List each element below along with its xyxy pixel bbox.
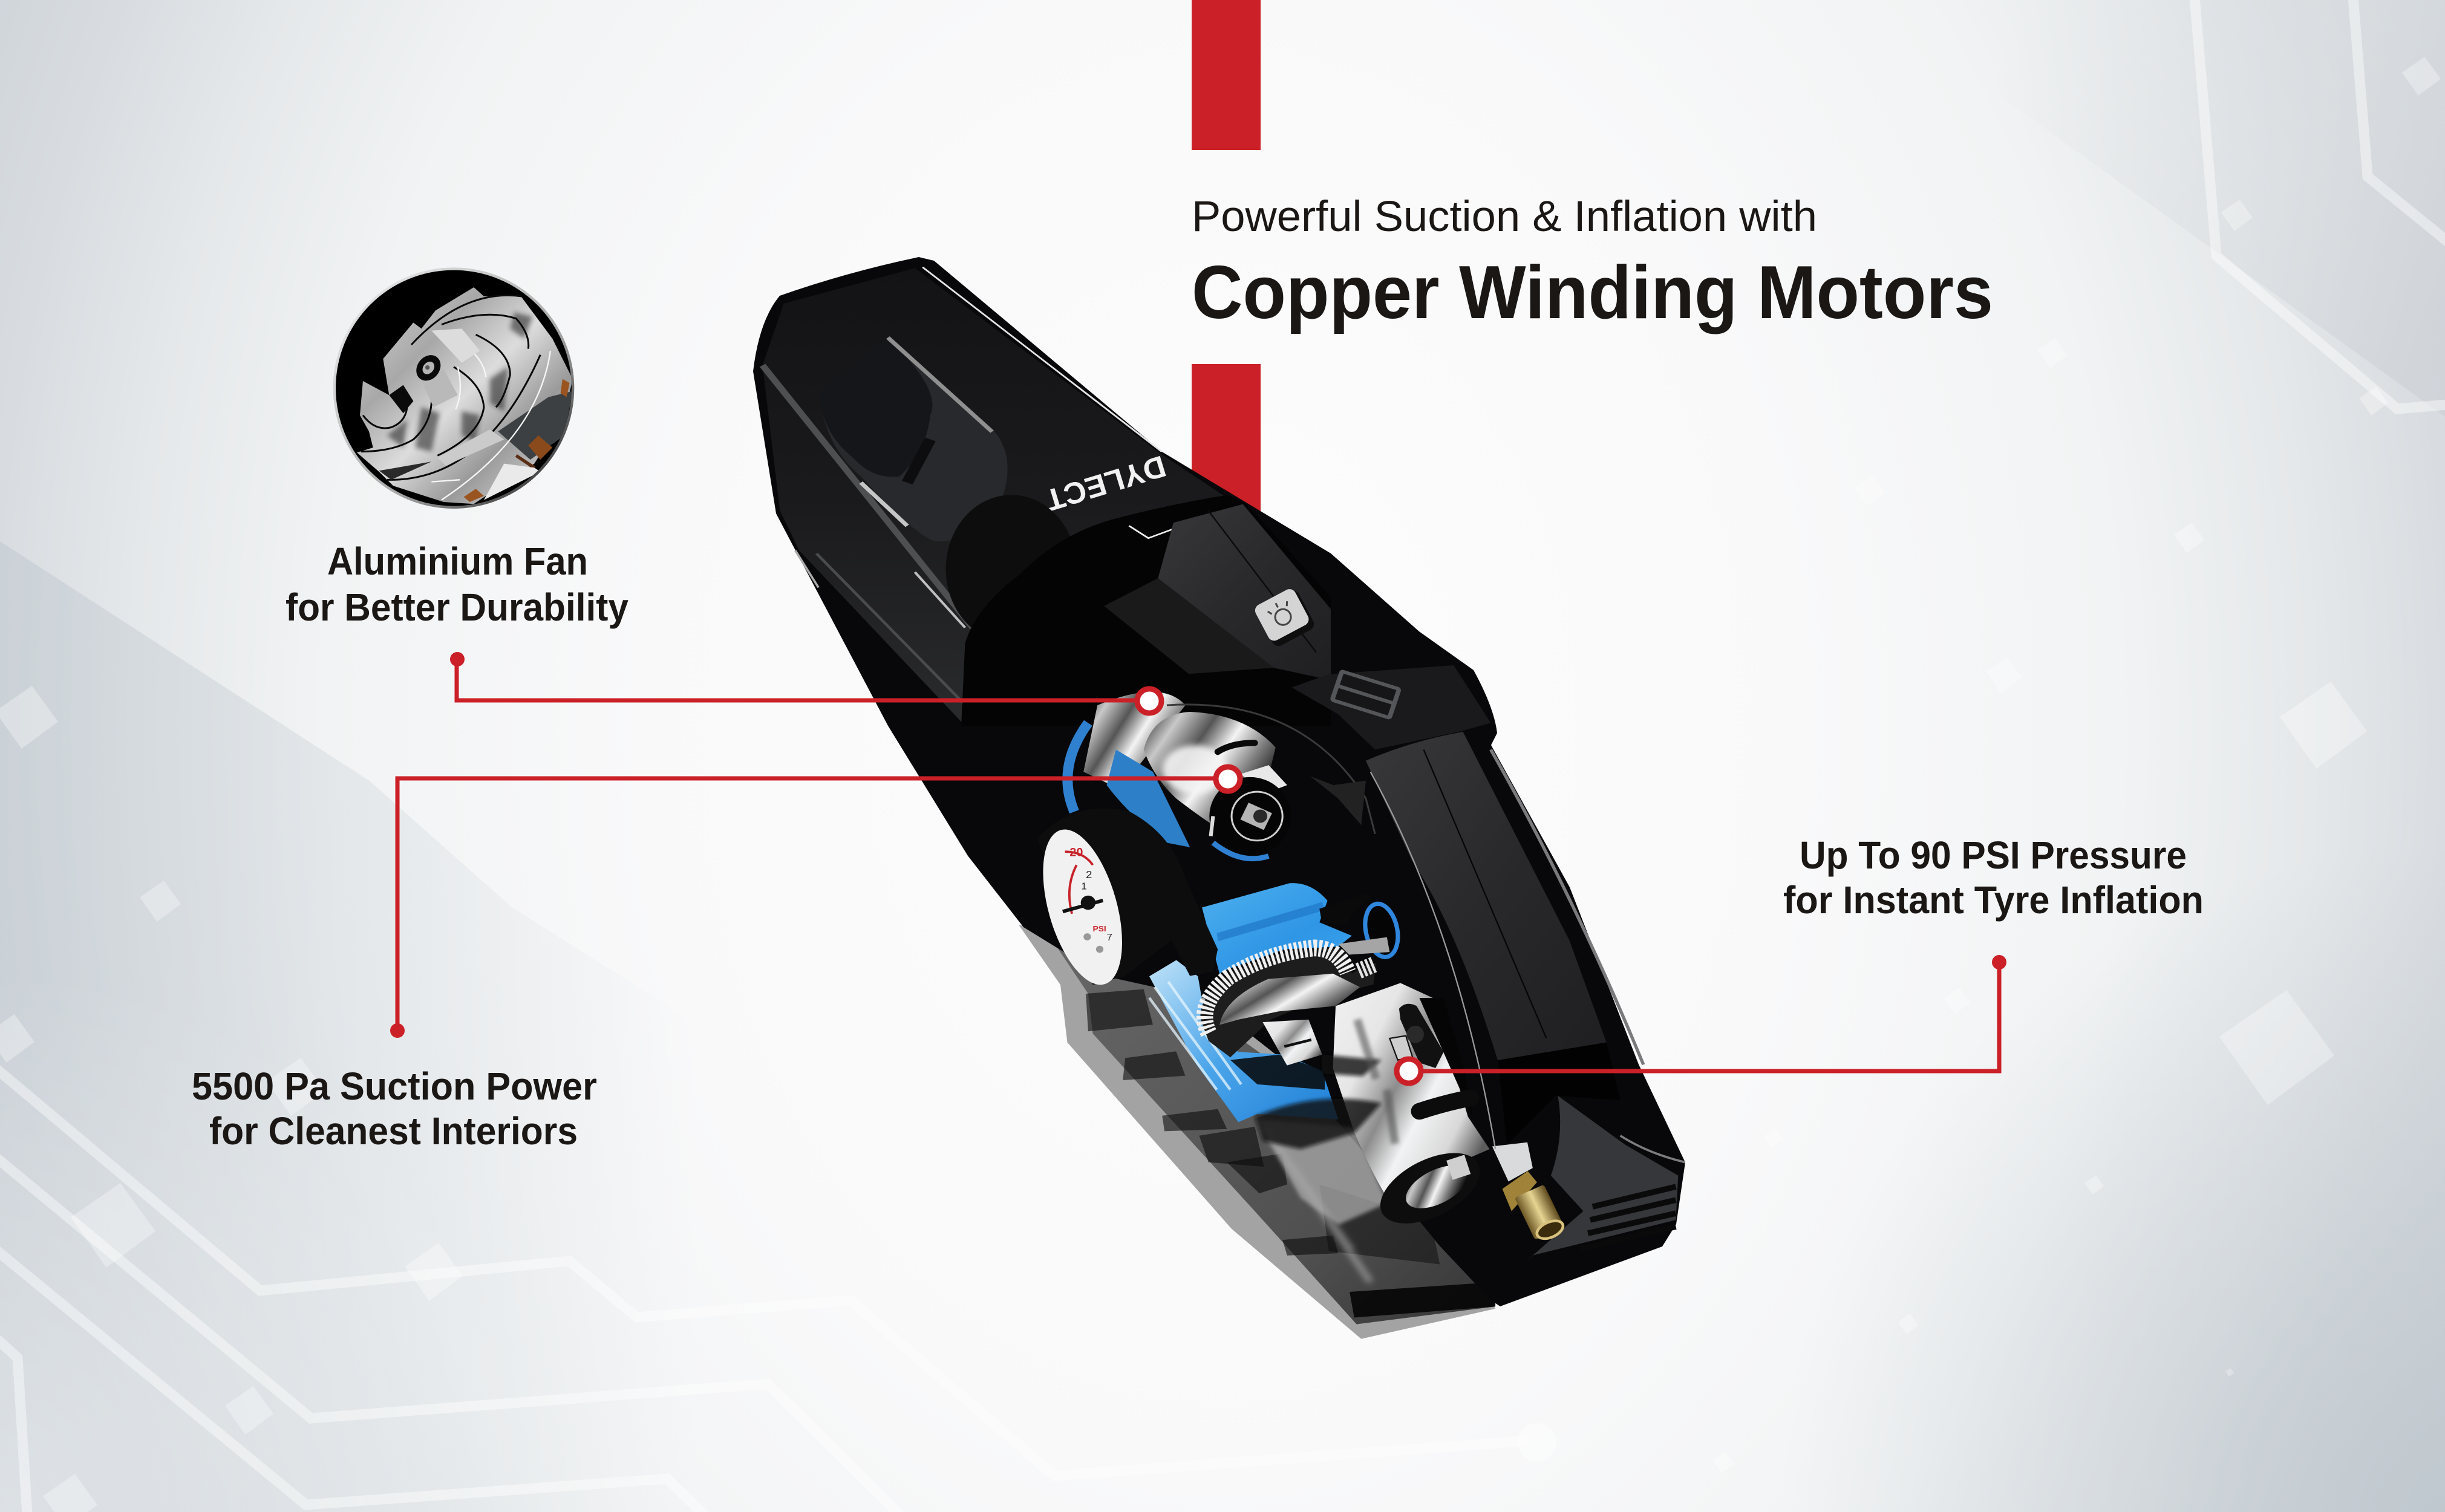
product: translucent ghost housing: [1019, 925, 1495, 1339]
icon: pressure gauge: 20: [1069, 846, 1083, 859]
lower blue flow: [1149, 960, 1338, 1122]
product: air pump and inflator motor: [1149, 883, 1533, 1238]
product: collar and top panel: [946, 495, 1331, 726]
callout: suction power leader line: [390, 767, 1240, 1038]
callout: PSI pressure leader line: [1397, 955, 2006, 1083]
label: aluminium fan: Aluminium Fan: [327, 539, 588, 583]
product: upper interior with suction motor: [1068, 665, 1490, 859]
product: dust bin: [763, 267, 1227, 726]
inner filter tube: [818, 337, 1008, 541]
label: suction power: for Cleanest Interiors: [209, 1109, 578, 1153]
dark ring support: [1360, 901, 1403, 960]
title: Copper Winding Motors: [1192, 251, 1993, 334]
USB ports: [1330, 669, 1402, 720]
icon: pressure gauge: 2: [1086, 869, 1092, 881]
label: PSI pressure: [1783, 833, 2204, 922]
callout: aluminium fan leader line: [450, 652, 1161, 713]
blue block: [1202, 883, 1352, 974]
product: right handle panel: [1366, 732, 1685, 1260]
icon: brass air nozzle: [1503, 1171, 1566, 1242]
fan image: [333, 267, 574, 509]
icon: pressure gauge: 1: [1081, 881, 1087, 891]
icon: light button: [1253, 585, 1316, 649]
brand logo: DYLECT: [1041, 449, 1170, 518]
motor end cap: [1369, 1138, 1491, 1238]
red accent bar: behind product: [1192, 364, 1261, 521]
title: Powerful Suction & Inflation with: [1192, 193, 1817, 241]
label: aluminium fan: for Better Durability: [286, 585, 628, 629]
icon: pressure gauge: PSI: [1093, 924, 1106, 933]
icon: pressure gauge: [1028, 809, 1218, 992]
shoulder panel: [1292, 665, 1490, 749]
motor bracket: [1399, 1004, 1444, 1068]
label: aluminium fan: [286, 539, 628, 629]
gear: [1200, 948, 1376, 1066]
red accent bar: top: [1192, 0, 1261, 150]
icon: pressure gauge: 7: [1106, 932, 1112, 943]
title: [1192, 193, 1993, 334]
motor shading: [1255, 1099, 1382, 1149]
translucent shell over motor: [1258, 1119, 1387, 1225]
label: PSI pressure: for Instant Tyre Inflation: [1783, 878, 2204, 922]
label: suction power: [192, 1064, 597, 1153]
label: PSI pressure: Up To 90 PSI Pressure: [1800, 833, 2187, 877]
product: solid body silhouette: [753, 257, 1685, 1306]
label: suction power: 5500 Pa Suction Power: [192, 1064, 597, 1108]
inflator motor body: [1333, 983, 1489, 1198]
